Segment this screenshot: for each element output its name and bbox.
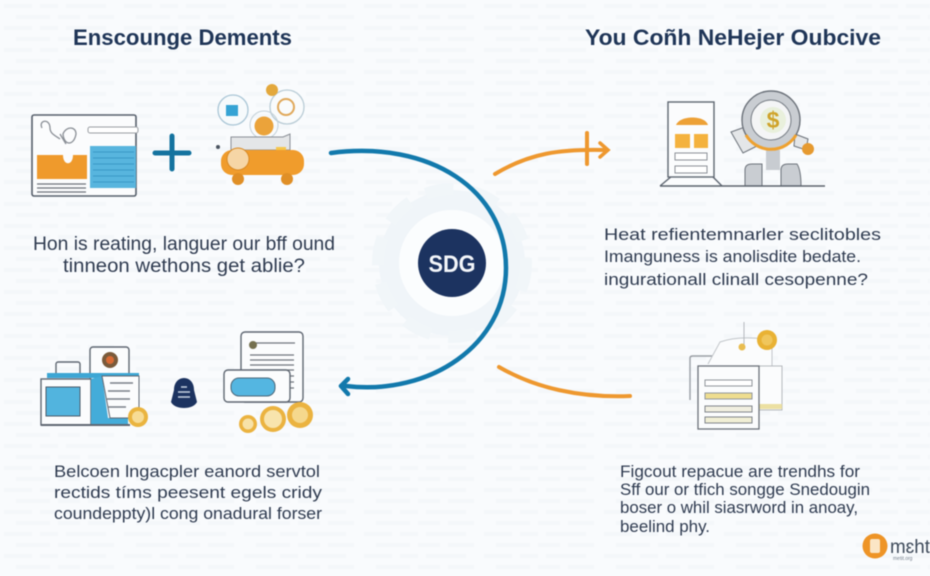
- icon: board and magnifier robot: [660, 91, 814, 186]
- central gear backdrop: [378, 189, 526, 337]
- text block: top left: Hon is reating, languer our bff ound: [33, 234, 335, 255]
- arrow: blue circular: [331, 151, 506, 394]
- icon: board and magnifier robot: $: [767, 107, 780, 133]
- icon: forms and coin: [690, 322, 782, 429]
- arrow: orange bottom: [499, 367, 630, 396]
- text block: top right: Heat refientemnarler seclitobles: [604, 225, 881, 244]
- text block: bottom right: Sff our or tfich songge Snedougin: [620, 480, 870, 499]
- text block: bottom left: rectids tíms peesent egels cridy: [54, 483, 323, 502]
- text block: bottom left: Belcoen lngacpler eanord servtol: [54, 462, 320, 481]
- text block: top right: Imanguness is anolisdite bedate.: [604, 247, 861, 266]
- heading: right column: You Coñh NeHejer Oubcive: [585, 25, 881, 50]
- text block: top left: tinneon wethons get ablie?: [63, 256, 305, 277]
- text block: bottom left: [54, 462, 323, 523]
- text block: top left: [33, 234, 335, 277]
- icon: orange compressor with bubbles: [216, 84, 304, 185]
- text block: bottom right: beelind phy.: [620, 517, 710, 536]
- icon: laptop and folder: [41, 347, 148, 427]
- text block: bottom right: boser o whil siasrword in anoay,: [620, 498, 858, 517]
- arrow: orange top: [495, 133, 608, 174]
- heading: left column: Enscounge Dements: [73, 25, 292, 50]
- text block: bottom right: [620, 462, 870, 536]
- logo: [862, 534, 930, 562]
- logo: mɛht: [890, 537, 930, 558]
- text block: bottom right: Figcout repacue are trendhs for: [620, 462, 860, 481]
- SDG centre badge: SDG: [428, 251, 476, 278]
- icon: navy badge: [171, 378, 197, 408]
- text block: bottom left: coundeppty)l cong onadural forser: [54, 504, 322, 523]
- ground line: [660, 185, 825, 187]
- logo: metit.org: [893, 556, 913, 562]
- icon: plus sign: [155, 136, 189, 169]
- icon: document with blue panel: [32, 115, 138, 196]
- icon: report with card and coins: [224, 332, 313, 433]
- text block: top right: ingurationall clinall cesopenne?: [604, 270, 868, 289]
- SDG centre badge: [418, 229, 486, 297]
- text block: top right: [604, 225, 881, 289]
